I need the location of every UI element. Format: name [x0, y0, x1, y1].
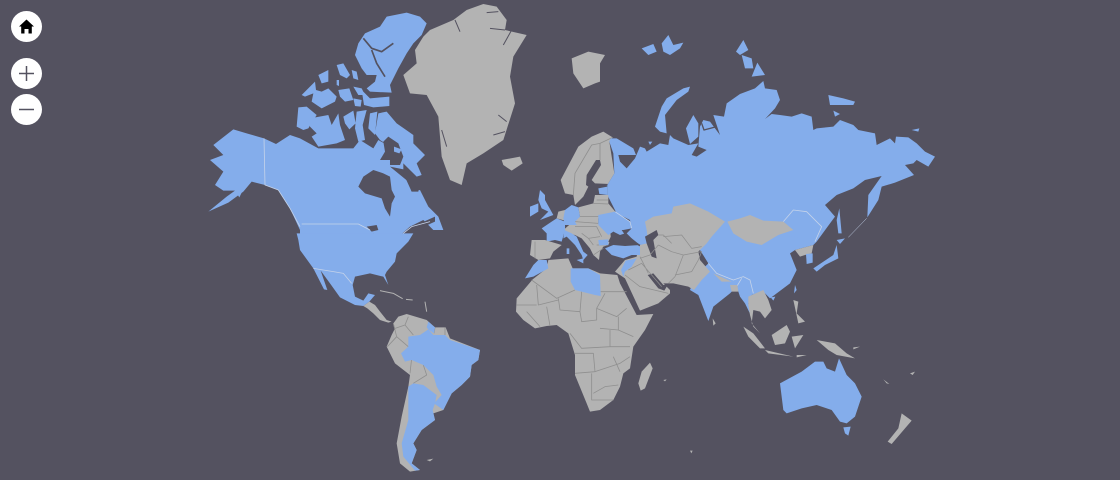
Germany [563, 205, 580, 225]
Black Sea [608, 230, 640, 246]
Caucasus [640, 243, 653, 255]
Turkey [605, 243, 640, 258]
Nepal [713, 273, 732, 282]
Australia [780, 358, 862, 436]
Russia [607, 81, 935, 247]
France [542, 218, 565, 242]
Italy [563, 230, 588, 263]
Argentina [402, 383, 437, 471]
Southeast Asia [748, 290, 772, 333]
Greenland [403, 4, 527, 185]
South America [387, 314, 480, 472]
Benelux [557, 210, 565, 221]
Madagascar [638, 363, 653, 391]
Africa [516, 258, 653, 412]
Americas south and Africa [297, 233, 653, 472]
Central Asia and Middle East [615, 203, 725, 311]
Europe and Near East [525, 190, 702, 293]
Border of Ukraine [615, 212, 632, 228]
Morocco [525, 260, 548, 278]
Ukraine [598, 212, 632, 235]
Scandinavia [561, 132, 614, 205]
Taiwan and Hainan [771, 285, 797, 301]
icon: home [19, 20, 34, 34]
Svalbard [572, 52, 605, 88]
Central America [363, 302, 392, 323]
Guyana [427, 322, 435, 333]
Spain and Portugal [530, 240, 562, 260]
North Eurasia: Russia and Scandinavia [561, 35, 935, 247]
Central and Eastern Europe [563, 195, 617, 260]
Israel and Lebanon [621, 258, 637, 277]
Mongolia [727, 215, 793, 245]
button: zoom in [11, 58, 42, 89]
button: zoom out [11, 94, 42, 125]
Bangladesh [730, 285, 738, 292]
United States and Mexico [297, 233, 413, 306]
Korea [795, 245, 813, 257]
Asia: China, India, Central Asia, SE Asia, Australia [615, 203, 915, 453]
button: home [11, 11, 42, 42]
Japan [813, 238, 845, 272]
United Kingdom and Ireland [530, 190, 553, 220]
Persian Gulf [648, 273, 668, 291]
Bulgaria [598, 239, 608, 245]
North America north: Canada, Alaska, Greenland [208, 4, 527, 242]
Caspian Sea [645, 230, 658, 258]
Pacific islands [663, 347, 915, 453]
Estonia [598, 187, 607, 195]
Falkland Islands [427, 459, 433, 461]
Caribbean [380, 291, 427, 312]
Libya [571, 268, 601, 296]
China and India [687, 227, 817, 321]
Indonesia, Philippines, Papua, Sri Lanka [713, 300, 855, 358]
Near East borders [625, 235, 702, 293]
Brazil [401, 329, 480, 410]
New Zealand [888, 413, 912, 444]
Iceland [502, 157, 523, 171]
Russian Arctic islands [642, 35, 919, 233]
